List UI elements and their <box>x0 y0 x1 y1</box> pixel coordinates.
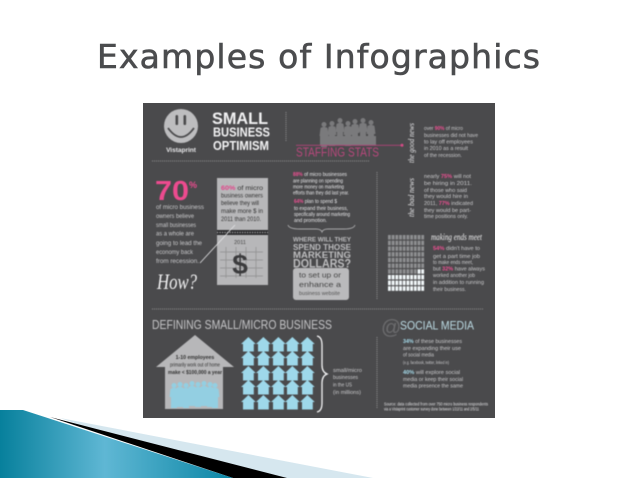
text: 70 percent statistic: % <box>189 180 197 190</box>
calendar card: 60 percent: make more $ in <box>221 209 263 215</box>
pink rule with dot <box>296 144 404 147</box>
chart: 100 square grid, 32 highlighted <box>388 235 425 292</box>
text: 70 percent statistic: from recession. <box>156 258 199 265</box>
text: marketing spending: more money on marketing <box>293 184 344 190</box>
text: making ends meet <box>432 246 485 293</box>
title: small business optimism <box>212 109 270 153</box>
heading: where will they spend: DOLLARS? <box>293 258 351 270</box>
text: bad news: nearly 75% will not <box>424 174 471 180</box>
text: making ends meet: get a part time job <box>433 254 480 260</box>
text: marketing spending: to expand their business, <box>294 206 348 212</box>
decorative slide corner swoosh <box>0 410 373 478</box>
text: good news: over 90% of micro <box>424 126 463 132</box>
text: social media statistics: (e.g. facebook, twitter, linked in) <box>403 360 449 365</box>
text: making ends meet: but 32% have always <box>433 266 485 272</box>
heading: defining small/micro business: DEFINING SMALL/MICRO BUSINESS <box>152 318 332 332</box>
panel: infographic background <box>143 103 495 418</box>
calendar card: 60 percent: believe they will <box>221 201 259 207</box>
callout: set up website <box>293 268 349 300</box>
text: small micro businesses count <box>333 368 362 396</box>
text: 70 percent statistic: as a whole are <box>156 230 194 238</box>
heading: staffing stats: STAFFING STATS <box>296 145 379 159</box>
icon: staff silhouettes <box>320 118 376 147</box>
pointer line <box>200 225 235 263</box>
text: bad news: they would be part- <box>424 208 471 214</box>
callout: set up website: business website <box>299 291 340 297</box>
text: social media statistics: are expanding their use <box>403 346 461 352</box>
text: social media statistics: media or keep their social <box>403 377 463 383</box>
brand name: Vistaprint <box>166 147 197 154</box>
text: 70 percent statistic: 70 <box>155 175 189 206</box>
text: good news: businesses did not have <box>424 133 478 139</box>
heading: where will they spend: MARKETING <box>293 250 351 261</box>
text: small micro businesses count: businesses <box>333 375 358 381</box>
text: 70 percent statistic: economy back <box>156 249 194 256</box>
handwritten question: How? <box>156 269 197 294</box>
text: marketing spending: are planning on spending <box>293 178 343 184</box>
title: small business optimism: BUSINESS <box>213 126 270 140</box>
text: social media statistics: media presence the same <box>403 384 463 390</box>
text: 70 percent statistic: owners believe <box>156 213 194 220</box>
text: small micro businesses count: small/micro <box>333 368 362 374</box>
heading: making ends meet: making ends meet <box>431 233 482 243</box>
text: good news: in 2010 as a result <box>424 146 468 152</box>
callout: set up website: enhance a <box>299 280 342 289</box>
icon: big house with employees <box>156 335 234 409</box>
text: 70 percent statistic: small businesses <box>156 222 197 229</box>
curly brace <box>288 225 355 232</box>
right curly brace <box>317 336 327 412</box>
text: small micro businesses count: in the US <box>333 382 352 388</box>
title: small business optimism: OPTIMISM <box>213 139 269 153</box>
text: marketing spending: 64% plan to spend $ <box>294 199 337 205</box>
source note <box>384 402 488 412</box>
source note: Source: data collected from over 750 micro business respondents <box>384 402 488 406</box>
text: social media statistics: of social media <box>403 352 435 358</box>
text: bad news: be hiring in 2011. <box>424 181 472 187</box>
icon: smiley face <box>164 109 198 143</box>
text: making ends meet: their business. <box>433 287 466 293</box>
text: marketing spending: specifically around marketing <box>294 212 350 218</box>
calendar card: 60 percent: 2011 than 2010. <box>221 217 261 223</box>
text: good news <box>424 126 478 159</box>
title: small business optimism: SMALL <box>212 109 268 128</box>
calendar card: 60 percent: $ <box>232 249 248 280</box>
icon: big house with employees: 1-10 employees <box>176 355 214 361</box>
text: making ends meet: 54% didn't have to <box>433 246 480 252</box>
icon: big house with employees: make < $100,000 a year <box>168 370 222 376</box>
text: making ends meet: worked another job <box>432 273 475 279</box>
text: bad news: they would hire in <box>424 194 468 200</box>
text: good news: to lay off employees <box>424 140 473 146</box>
label: the good news: the good news <box>406 122 416 163</box>
calendar card: 60 percent <box>217 178 268 285</box>
slide title: Examples of Infographics <box>97 37 540 76</box>
text: small micro businesses count: (in millions) <box>333 390 361 396</box>
text: marketing spending: efforts than they did last year. <box>293 190 349 196</box>
heading: where will they spend <box>293 236 352 270</box>
heading: where will they spend: SPEND THOSE <box>293 242 351 252</box>
text: social media statistics <box>403 339 463 390</box>
heading: social media <box>381 317 474 339</box>
text: marketing spending: 88% of micro businesses <box>293 172 347 178</box>
heading: where will they spend: WHERE WILL THEY <box>293 236 352 244</box>
text: bad news <box>424 174 473 220</box>
callout: set up website: to set up or <box>299 270 342 280</box>
text: 70 percent statistic <box>155 175 205 265</box>
label: the bad news: the bad news <box>406 177 416 217</box>
heading: social media: SOCIAL MEDIA <box>400 318 474 332</box>
heading: social media: @ <box>381 317 401 339</box>
chart: 25 small houses <box>241 337 315 410</box>
text: 70 percent statistic: of micro business <box>156 204 205 211</box>
source note: via a Vistaprint customer survey done between 1/22/11 and 2/5/11 <box>384 406 480 412</box>
text: good news: of the recession. <box>424 153 462 159</box>
text: marketing spending: and promotion. <box>294 218 327 224</box>
text: making ends meet: to make ends meet, <box>433 260 473 266</box>
text: making ends meet: in addition to running <box>433 280 484 286</box>
text: bad news: time positions only. <box>424 214 468 220</box>
panel: infographic content <box>152 109 488 412</box>
calendar card: 60 percent: 2011 <box>234 240 246 246</box>
text: bad news: 2011, 77% indicated <box>424 201 473 207</box>
calendar card: 60 percent: 60% of micro <box>221 185 264 192</box>
text: marketing spending <box>293 172 350 224</box>
icon: big house with employees: primarily work out of home <box>170 362 220 368</box>
text: social media statistics: 40% will explore social <box>403 370 460 376</box>
text: social media statistics: 34% of these businesses <box>403 339 462 345</box>
text: 70 percent statistic: going to lead the <box>156 240 202 247</box>
calendar card: 60 percent: business owners <box>221 194 263 200</box>
text: bad news: of those who said <box>424 188 467 194</box>
